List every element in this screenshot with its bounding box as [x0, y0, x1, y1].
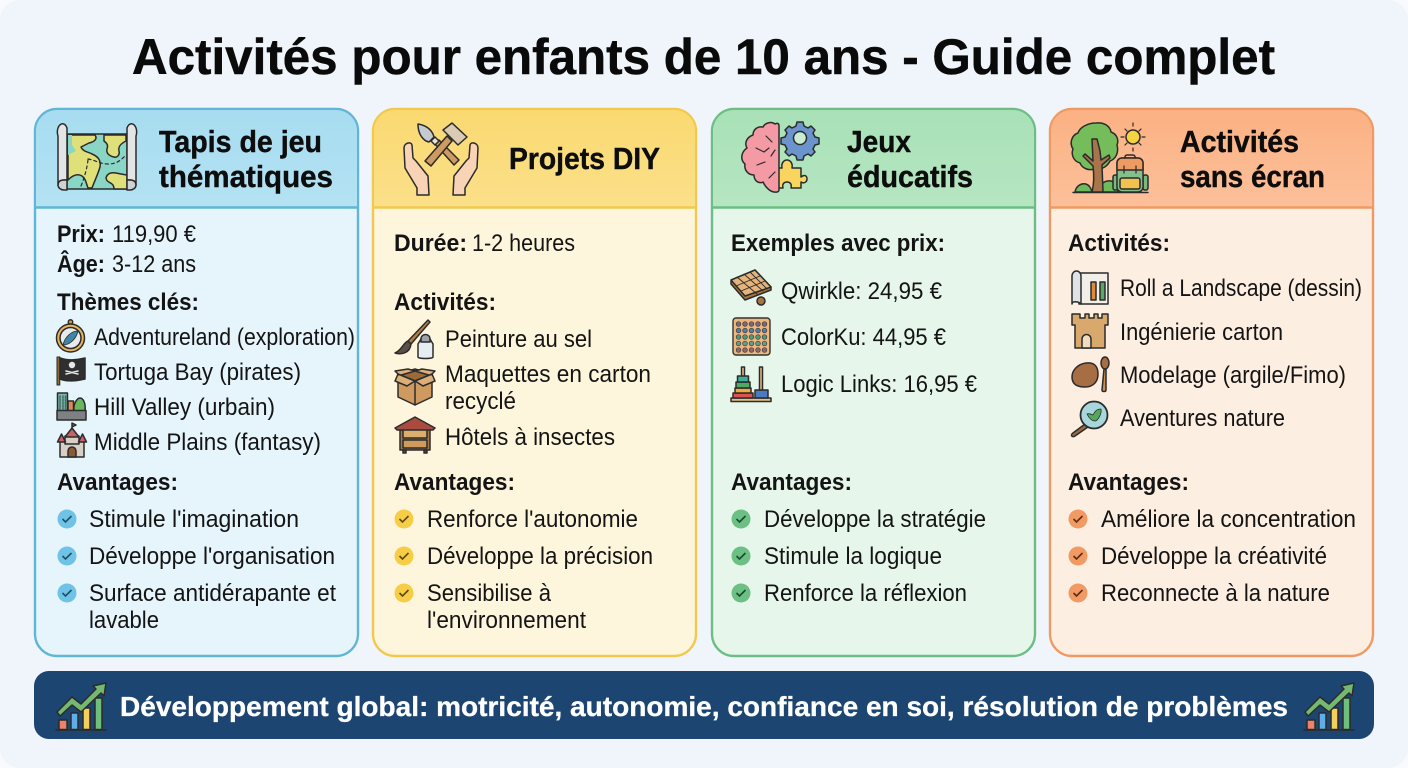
list item: colorku: ColorKu: 44,95 € [781, 324, 947, 351]
list item: modelage: Modelage (argile/Fimo) [1120, 362, 1346, 389]
icon: hands with tools [404, 123, 478, 195]
text block: durée [394, 230, 575, 257]
panel heading: jeux [847, 124, 973, 194]
panel: projets DIY [373, 109, 696, 656]
icon: compass [56, 320, 84, 352]
panel heading: jeux: éducatifs [847, 159, 973, 194]
icon: check bullet [732, 510, 750, 528]
list item: concentration: Améliore la concentration [1101, 506, 1356, 533]
list item: peinture: Peinture au sel [445, 326, 592, 353]
icon: magnifier leaf [1072, 402, 1108, 437]
list item: aventures: Aventures nature [1120, 405, 1285, 432]
list item: organisation: Développe l'organisation [89, 543, 335, 570]
text block: durée: 1-2 heures [472, 230, 575, 257]
list item: roll a landscape: Roll a Landscape (dessin) [1120, 275, 1362, 302]
text block: prix et âge: 3-12 ans [112, 251, 196, 278]
icon: cardboard castle [1072, 314, 1108, 348]
icon: insect hotel [395, 417, 435, 453]
subheading: avantages jeux: Avantages: [731, 469, 852, 496]
list item: tortuga bay: Tortuga Bay (pirates) [94, 359, 301, 386]
icon: growth chart left [56, 683, 106, 730]
list item: hill valley: Hill Valley (urbain) [94, 394, 275, 421]
panel heading: DIY: Projets DIY [509, 141, 660, 176]
icon: brush and salt [395, 320, 433, 358]
icon: check bullet [1068, 546, 1088, 566]
subheading: thèmes clés: Thèmes clés: [57, 289, 199, 316]
icon: check bullet [732, 584, 750, 602]
panel header: tapis [35, 110, 358, 208]
icon: check bullet [1068, 584, 1088, 602]
panel heading: jeux: Jeux [847, 124, 912, 159]
list item: imagination: Stimule l'imagination [89, 506, 299, 533]
icon: treasure map [57, 124, 137, 190]
text block: prix et âge: Prix: [57, 221, 105, 248]
list item: hôtels: Hôtels à insectes [445, 424, 615, 451]
icon: check bullet [1068, 510, 1088, 528]
icon: check bullet [394, 510, 414, 528]
list item: autonomie: Renforce l'autonomie [427, 506, 638, 533]
panel: activités sans écran [1050, 109, 1373, 656]
text block: prix et âge [57, 221, 197, 278]
list item: nature: Reconnecte à la nature [1101, 580, 1330, 607]
banner text: Développement global: motricité, autonomie, confiance en soi, résolution de problèmes [120, 691, 1288, 722]
panel heading: sans écran: Activités [1180, 124, 1299, 159]
icon: city [57, 393, 86, 420]
list item: middle plains: Middle Plains (fantasy) [94, 429, 321, 456]
panel heading: sans écran [1180, 124, 1325, 194]
icon: colorku board [733, 318, 770, 355]
panel heading: tapis: thématiques [159, 159, 333, 194]
subheading: avantages DIY: Avantages: [394, 469, 515, 496]
list item: maquettes: Maquettes en carton [445, 361, 651, 388]
subheading: activités DIY: Activités: [394, 289, 496, 316]
list item: créativité: Développe la créativité [1101, 543, 1327, 570]
panel: tapis de jeu thématiques [35, 109, 358, 656]
list item: environnement [427, 580, 586, 634]
list item: environnement: l'environnement [427, 607, 586, 634]
list item: environnement: Sensibilise à [427, 580, 552, 607]
text block: prix et âge: Âge: [57, 250, 105, 278]
subheading: avantages écran: Avantages: [1068, 469, 1189, 496]
subheading: exemples: Exemples avec prix: [731, 230, 945, 257]
panel header: DIY [373, 110, 696, 208]
list item: réflexion: Renforce la réflexion [764, 580, 967, 607]
list item: qwirkle: Qwirkle: 24,95 € [781, 278, 943, 305]
list item: surface [89, 580, 336, 634]
icon: pirate flag [57, 357, 85, 385]
list item: stratégie: Développe la stratégie [764, 506, 986, 533]
icon: castle [58, 423, 86, 457]
icon: stacking towers [731, 367, 771, 402]
icon: check bullet [58, 510, 76, 528]
list item: maquettes [445, 361, 651, 415]
list item: maquettes: recyclé [445, 388, 516, 415]
panel heading: tapis: Tapis de jeu [159, 124, 322, 159]
subheading: activités écran: Activités: [1068, 230, 1170, 257]
panel heading: tapis [159, 124, 333, 194]
list item: précision: Développe la précision [427, 543, 653, 570]
list item: logic links: Logic Links: 16,95 € [781, 371, 978, 398]
panel header: jeux [712, 110, 1035, 208]
title: Activités pour enfants de 10 ans - Guide complet [132, 29, 1275, 85]
icon: check bullet [58, 546, 76, 566]
panel header: sans écran [1050, 110, 1373, 208]
panel heading: sans écran: sans écran [1180, 159, 1325, 194]
icon: check bullet [732, 546, 750, 566]
list item: surface: lavable [89, 607, 159, 634]
icon: clay and tool [1072, 357, 1109, 392]
icon: check bullet [394, 584, 414, 602]
list item: adventureland: Adventureland (exploration) [94, 324, 355, 351]
icon: brain gear puzzle [742, 122, 819, 192]
list item: ingénierie: Ingénierie carton [1120, 319, 1283, 346]
icon: growth chart right [1304, 683, 1354, 730]
subheading: avantages tapis: Avantages: [57, 469, 178, 496]
icon: check bullet [394, 546, 414, 566]
list item: surface: Surface antidérapante et [89, 580, 336, 607]
icon: cardboard box [395, 369, 435, 405]
icon: qwirkle tiles [731, 270, 771, 305]
icon: check bullet [58, 584, 76, 602]
text block: prix et âge: 119,90 € [112, 221, 197, 248]
banner: développement global [34, 671, 1374, 739]
list item: logique: Stimule la logique [764, 543, 942, 570]
panel: jeux éducatifs [712, 109, 1035, 656]
text block: durée: Durée: [394, 230, 467, 257]
icon: paper roll and pencils [1072, 271, 1108, 304]
icon: tree sun backpack [1071, 123, 1148, 192]
